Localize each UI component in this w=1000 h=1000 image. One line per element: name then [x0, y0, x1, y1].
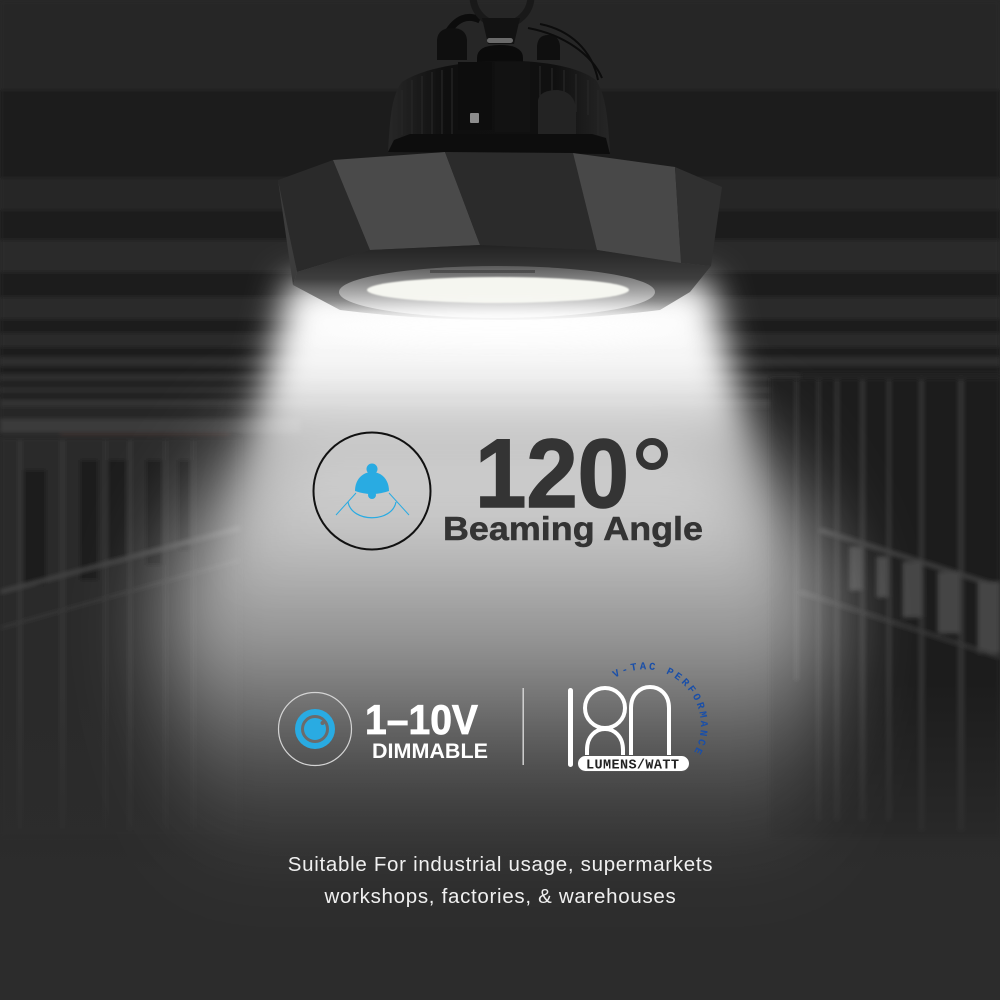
- divider: [522, 688, 524, 765]
- icon: beam angle: [314, 432, 430, 550]
- description text: Suitable For industrial usage, supermarkets: [288, 853, 713, 876]
- subheading: beaming angle: Beaming Angle: [443, 510, 703, 547]
- 180 lumens per watt badge: V-TAC PERFORMANCE: [612, 662, 708, 755]
- mounting stem and bolt: [458, 62, 492, 130]
- 180 lumens per watt badge: [568, 662, 708, 774]
- cable glands: [437, 28, 467, 60]
- wires and eye bolt: [447, 0, 602, 80]
- floor fade: [0, 680, 1000, 1000]
- 180 lumens per watt badge: LUMENS/WATT: [586, 758, 679, 774]
- description text: [288, 853, 713, 908]
- bright upper glow: [230, 280, 770, 620]
- hood facets: [278, 160, 370, 272]
- light bleed over lamp rim: [310, 310, 690, 346]
- 1-10V dimmable label: 1–10V: [365, 696, 478, 743]
- 1-10V dimmable label: DIMMABLE: [372, 739, 488, 763]
- ceiling beams: [0, 0, 1000, 436]
- icon: dimmer knob: [278, 692, 352, 766]
- product: high-bay lamp: [278, 0, 722, 320]
- underside ring: [293, 245, 711, 320]
- right side columns: [770, 378, 1000, 838]
- heading: 120 degrees: 120: [475, 419, 629, 528]
- wide lower glow: [165, 430, 835, 900]
- left side columns: [0, 437, 240, 837]
- light glow: [165, 280, 835, 900]
- bright lens: [367, 277, 629, 303]
- description text: workshops, factories, & warehouses: [324, 885, 676, 908]
- 1-10V dimmable label: [365, 696, 488, 763]
- heatsink: [388, 61, 610, 152]
